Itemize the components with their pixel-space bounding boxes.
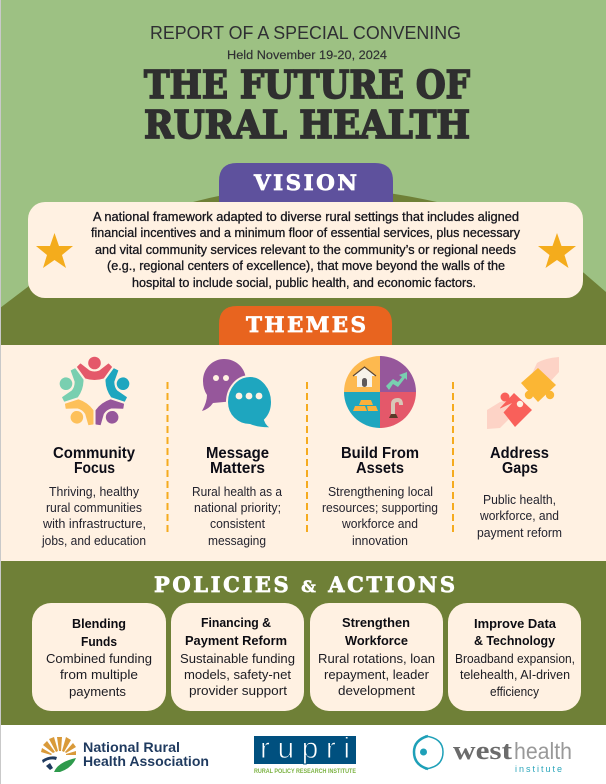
body: resources; supporting	[322, 500, 438, 515]
card: financing and payment reform: Financing &	[201, 615, 271, 630]
icon: left star	[36, 233, 73, 268]
body: workforce and	[341, 516, 418, 531]
heading: Message	[206, 445, 269, 462]
heading: Community	[53, 445, 135, 462]
theme: build from assets	[322, 445, 438, 548]
card: financing and payment reform	[171, 603, 304, 711]
background: light green sky	[0, 0, 606, 345]
body: payment reform	[477, 525, 562, 540]
card: blending funds: from multiple	[60, 667, 138, 682]
logo: West Health Institute: west	[453, 736, 512, 765]
card: strengthen workforce: Rural rotations, loan	[318, 651, 435, 666]
card: improve data and technology: efficiency	[490, 684, 539, 699]
title: RURAL HEALTH	[144, 102, 470, 147]
body: rural communities	[46, 500, 142, 515]
card: improve data and technology: Broadband expansion,	[455, 651, 575, 666]
body	[322, 484, 438, 548]
card: financing and payment reform: provider support	[189, 683, 287, 698]
heading	[490, 445, 549, 477]
heading	[53, 445, 135, 477]
body: innovation	[352, 533, 408, 548]
panel: vision statement	[28, 202, 583, 298]
body	[41, 484, 146, 548]
panel: policies band	[0, 561, 606, 725]
themes heading pill: THEMES	[246, 313, 366, 338]
logo: West Health Institute: health	[514, 738, 572, 764]
logo: RUPRI: RURAL POLICY RESEARCH INSTITUTE	[254, 769, 356, 775]
heading	[341, 445, 419, 477]
vision text: (e.g., regional centers of excellence), that move beyond the walls of the	[107, 258, 505, 273]
heading: Focus	[74, 460, 115, 477]
vision text: financial incentives and a minimum floor of essential services, plus necessary	[91, 225, 520, 240]
icon: community circle of people	[55, 357, 134, 432]
vision text: A national framework adapted to diverse rural settings that includes aligned	[93, 209, 519, 224]
vision text: hospital to include social, public health, and economic factors.	[132, 275, 476, 290]
dashed dividers	[168, 382, 453, 533]
card: blending funds	[32, 603, 166, 711]
theme: message matters	[192, 445, 283, 548]
body: Rural health as a	[192, 484, 283, 499]
card: financing and payment reform: Sustainable funding	[180, 651, 295, 666]
heading: Matters	[210, 460, 265, 477]
logo: West Health Institute: institute	[515, 764, 562, 774]
logo: West Health Institute	[414, 736, 572, 774]
title: THE FUTURE OF	[144, 62, 470, 107]
card: strengthen workforce: development	[338, 683, 415, 698]
date: Held November 19-20, 2024	[227, 50, 388, 62]
body: national priority;	[194, 500, 281, 515]
body: messaging	[208, 533, 266, 548]
body: Public health,	[483, 492, 556, 507]
card: strengthen workforce: Workforce	[345, 633, 408, 648]
title	[144, 62, 470, 147]
card: improve data and technology	[448, 603, 581, 711]
heading: Gaps	[502, 460, 538, 477]
icon: right star	[538, 233, 576, 268]
subtitle: REPORT OF A SPECIAL CONVENING	[150, 23, 461, 43]
logo: National Rural Health Association	[41, 737, 209, 772]
body: Strengthening local	[328, 484, 433, 499]
panel: themes background	[0, 345, 606, 561]
icon: asset map circle	[344, 356, 416, 428]
card: strengthen workforce	[310, 603, 443, 711]
heading: Build From	[341, 445, 419, 462]
card: strengthen workforce: repayment, leader	[324, 667, 430, 682]
body: workforce, and	[479, 508, 559, 523]
logo: National Rural Health Association: National Rural	[83, 739, 180, 755]
logo: National Rural Health Association: Health Association	[83, 753, 209, 769]
card: strengthen workforce: Strengthen	[342, 615, 410, 630]
card: financing and payment reform: Payment Reform	[185, 633, 287, 648]
body	[192, 484, 283, 548]
icon: puzzle pieces and hands	[487, 357, 559, 429]
vision heading pill: VISION	[253, 171, 357, 196]
card: blending funds: Funds	[81, 634, 117, 649]
body: jobs, and education	[41, 533, 146, 548]
left page edge	[0, 0, 1, 784]
icon: speech bubbles	[202, 359, 273, 428]
heading: Address	[490, 445, 549, 462]
body: with infrastructure,	[42, 516, 146, 531]
themes heading pill	[219, 306, 392, 345]
header	[144, 23, 470, 147]
card: blending funds: Combined funding	[46, 651, 152, 666]
body: consistent	[210, 516, 265, 531]
card: blending funds: payments	[69, 684, 126, 699]
heading: Assets	[356, 460, 404, 477]
body	[477, 492, 562, 540]
logo: RUPRI	[254, 732, 356, 775]
card: financing and payment reform: models, safety-net	[184, 667, 291, 682]
card: improve data and technology: & Technology	[474, 633, 556, 648]
theme: community focus	[41, 445, 146, 548]
background: green hill	[0, 187, 606, 345]
heading	[206, 445, 269, 477]
vision heading pill	[219, 163, 393, 210]
policies heading: POLICIES & ACTIONS	[154, 572, 455, 597]
card: blending funds: Blending	[72, 616, 126, 631]
card: improve data and technology: Improve Data	[474, 616, 557, 631]
body: Thriving, healthy	[49, 484, 139, 499]
vision text	[91, 209, 520, 290]
logo: RUPRI: rupri	[260, 732, 350, 765]
card: improve data and technology: telehealth, AI-driven	[460, 667, 570, 682]
vision text: and vital community services relevant to the community’s or regional needs	[95, 242, 516, 257]
theme: address gaps	[477, 445, 562, 540]
